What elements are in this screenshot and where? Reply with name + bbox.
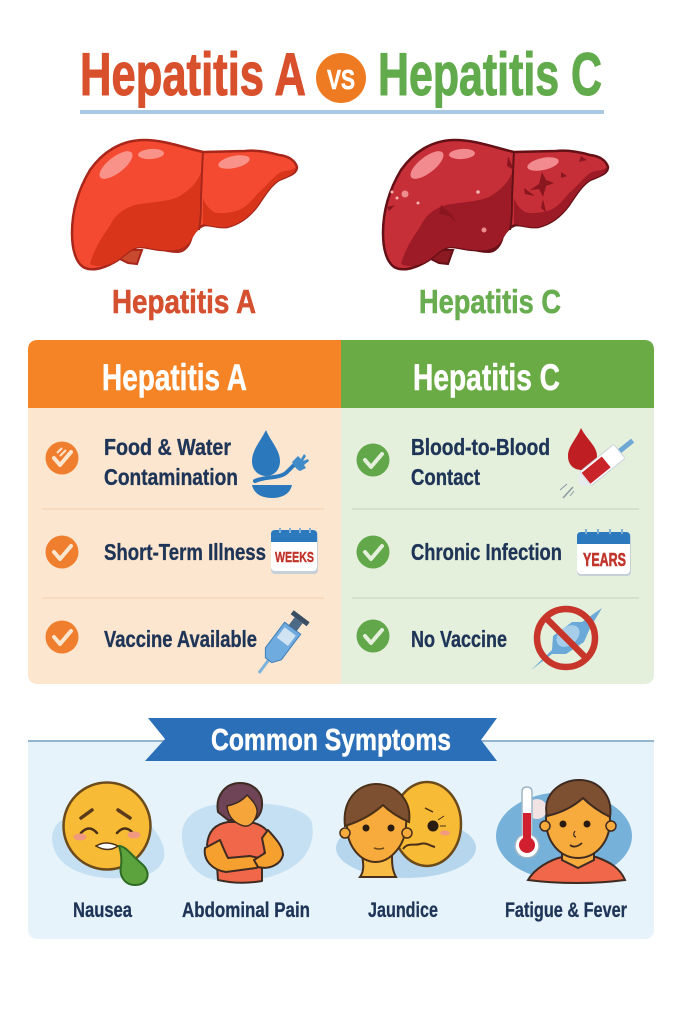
row: chronic infection: Chronic Infection [411, 539, 562, 565]
icon: healthy liver [72, 140, 297, 269]
row: chronic infection [356, 529, 631, 576]
banner: Common Symptoms [145, 718, 497, 761]
label: Hepatitis A liver: Hepatitis A [112, 283, 256, 320]
icon: blood drop and syringe [560, 428, 638, 498]
row: no vaccine [356, 608, 602, 670]
row: vaccine available [46, 610, 310, 679]
row: food and water contamination: Food & Water [104, 434, 231, 460]
row: short-term illness [46, 528, 318, 574]
row: blood-to-blood contact [356, 428, 638, 498]
label: Fatigue & Fever [505, 899, 627, 922]
title: Hepatitis A [80, 41, 306, 108]
label: Nausea [73, 899, 132, 922]
icon: calendar weeks [271, 528, 318, 574]
symptom: abdominal pain [182, 783, 313, 922]
panel: Hepatitis A comparison [28, 340, 341, 684]
heading: Hepatitis A: Hepatitis A [102, 357, 247, 398]
icon: syringe [251, 610, 310, 679]
row: short-term illness: Short-Term Illness [104, 539, 266, 565]
heading: Hepatitis C: Hepatitis C [413, 357, 560, 398]
label: Abdominal Pain [182, 899, 310, 922]
label: Jaundice [368, 899, 438, 922]
panel: common symptoms [28, 718, 654, 939]
symptom: jaundice [336, 782, 476, 922]
banner: Common Symptoms: Common Symptoms [211, 722, 451, 757]
icon: damaged liver [383, 140, 608, 269]
icon: crossed-out vaccine [531, 608, 602, 670]
icon: calendar years: YEARS [583, 550, 626, 570]
panel: Hepatitis C comparison [341, 340, 654, 684]
title: Hepatitis C [378, 41, 602, 108]
symptom: fatigue and fever [496, 780, 632, 922]
row: vaccine available: Vaccine Available [104, 626, 257, 652]
symptom: nausea [52, 782, 164, 922]
label: Hepatitis C liver: Hepatitis C [419, 283, 561, 320]
title: VS [327, 64, 355, 95]
row: no vaccine: No Vaccine [411, 626, 507, 652]
icon: calendar years [577, 529, 631, 576]
row: food and water contamination [46, 430, 309, 498]
row: food and water contamination: Contamination [104, 464, 238, 490]
row: blood-to-blood contact: Contact [411, 464, 480, 490]
title [80, 41, 604, 114]
row: blood-to-blood contact: Blood-to-Blood [411, 434, 550, 460]
icon: water drop and fork [252, 430, 309, 498]
icon: calendar weeks: WEEKS [275, 549, 314, 566]
